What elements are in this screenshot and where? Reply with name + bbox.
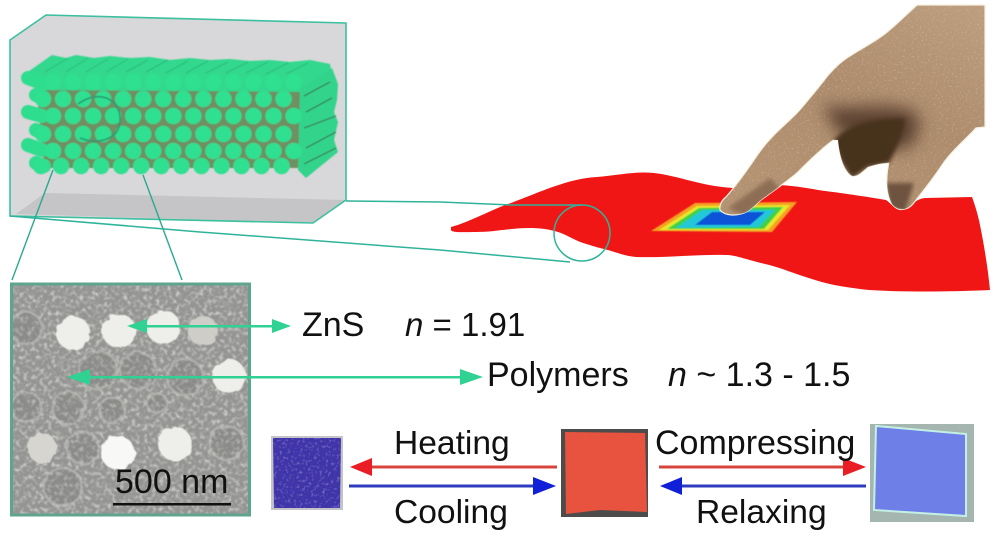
panel: red deformable film	[451, 172, 990, 292]
arrow: cooling	[349, 477, 556, 495]
top face of cylinders	[22, 55, 332, 92]
arrow: heating	[350, 458, 557, 476]
panel: SEM micrograph	[10, 284, 250, 515]
label: ZnS refractive index: ZnS	[302, 306, 364, 344]
label: Polymers refractive index	[487, 356, 850, 394]
cylinder end faces	[41, 82, 310, 166]
sample photo: blue, heated	[271, 436, 343, 510]
label: Relaxing: Relaxing	[696, 494, 827, 531]
label: Heating: Heating	[394, 425, 510, 462]
label: Polymers refractive index: n ~ 1.3 - 1.5	[668, 356, 850, 394]
icon: pointing hand	[719, 4, 986, 216]
arrow: relaxing	[660, 477, 866, 495]
icon: zoom circle on the film with leader lines	[10, 201, 610, 262]
cylinder bundle	[22, 55, 338, 178]
label: ZnS refractive index	[302, 306, 525, 344]
sample photo: red, original	[561, 429, 648, 517]
sample photo: blue, compressed	[870, 424, 974, 522]
right side of cylinders	[298, 68, 338, 178]
left side of cylinders	[28, 78, 44, 166]
filled white ZnS pores	[27, 310, 246, 470]
panel: 3D nanostructure box	[10, 15, 346, 223]
zoom connector lines from box to micrograph	[12, 170, 182, 280]
arrow: Polymers double arrow	[67, 369, 483, 385]
arrow: ZnS double arrow	[127, 319, 291, 333]
pressure heat map	[651, 202, 797, 232]
hollow ring pores	[10, 312, 244, 506]
label: Cooling: Cooling	[394, 494, 508, 531]
arrow: compressing	[659, 458, 866, 476]
label: ZnS refractive index: n = 1.91	[405, 306, 525, 343]
label: Polymers refractive index: Polymers	[487, 356, 629, 394]
label: Compressing: Compressing	[655, 424, 855, 462]
scale bar label: 500 nm	[115, 463, 228, 501]
